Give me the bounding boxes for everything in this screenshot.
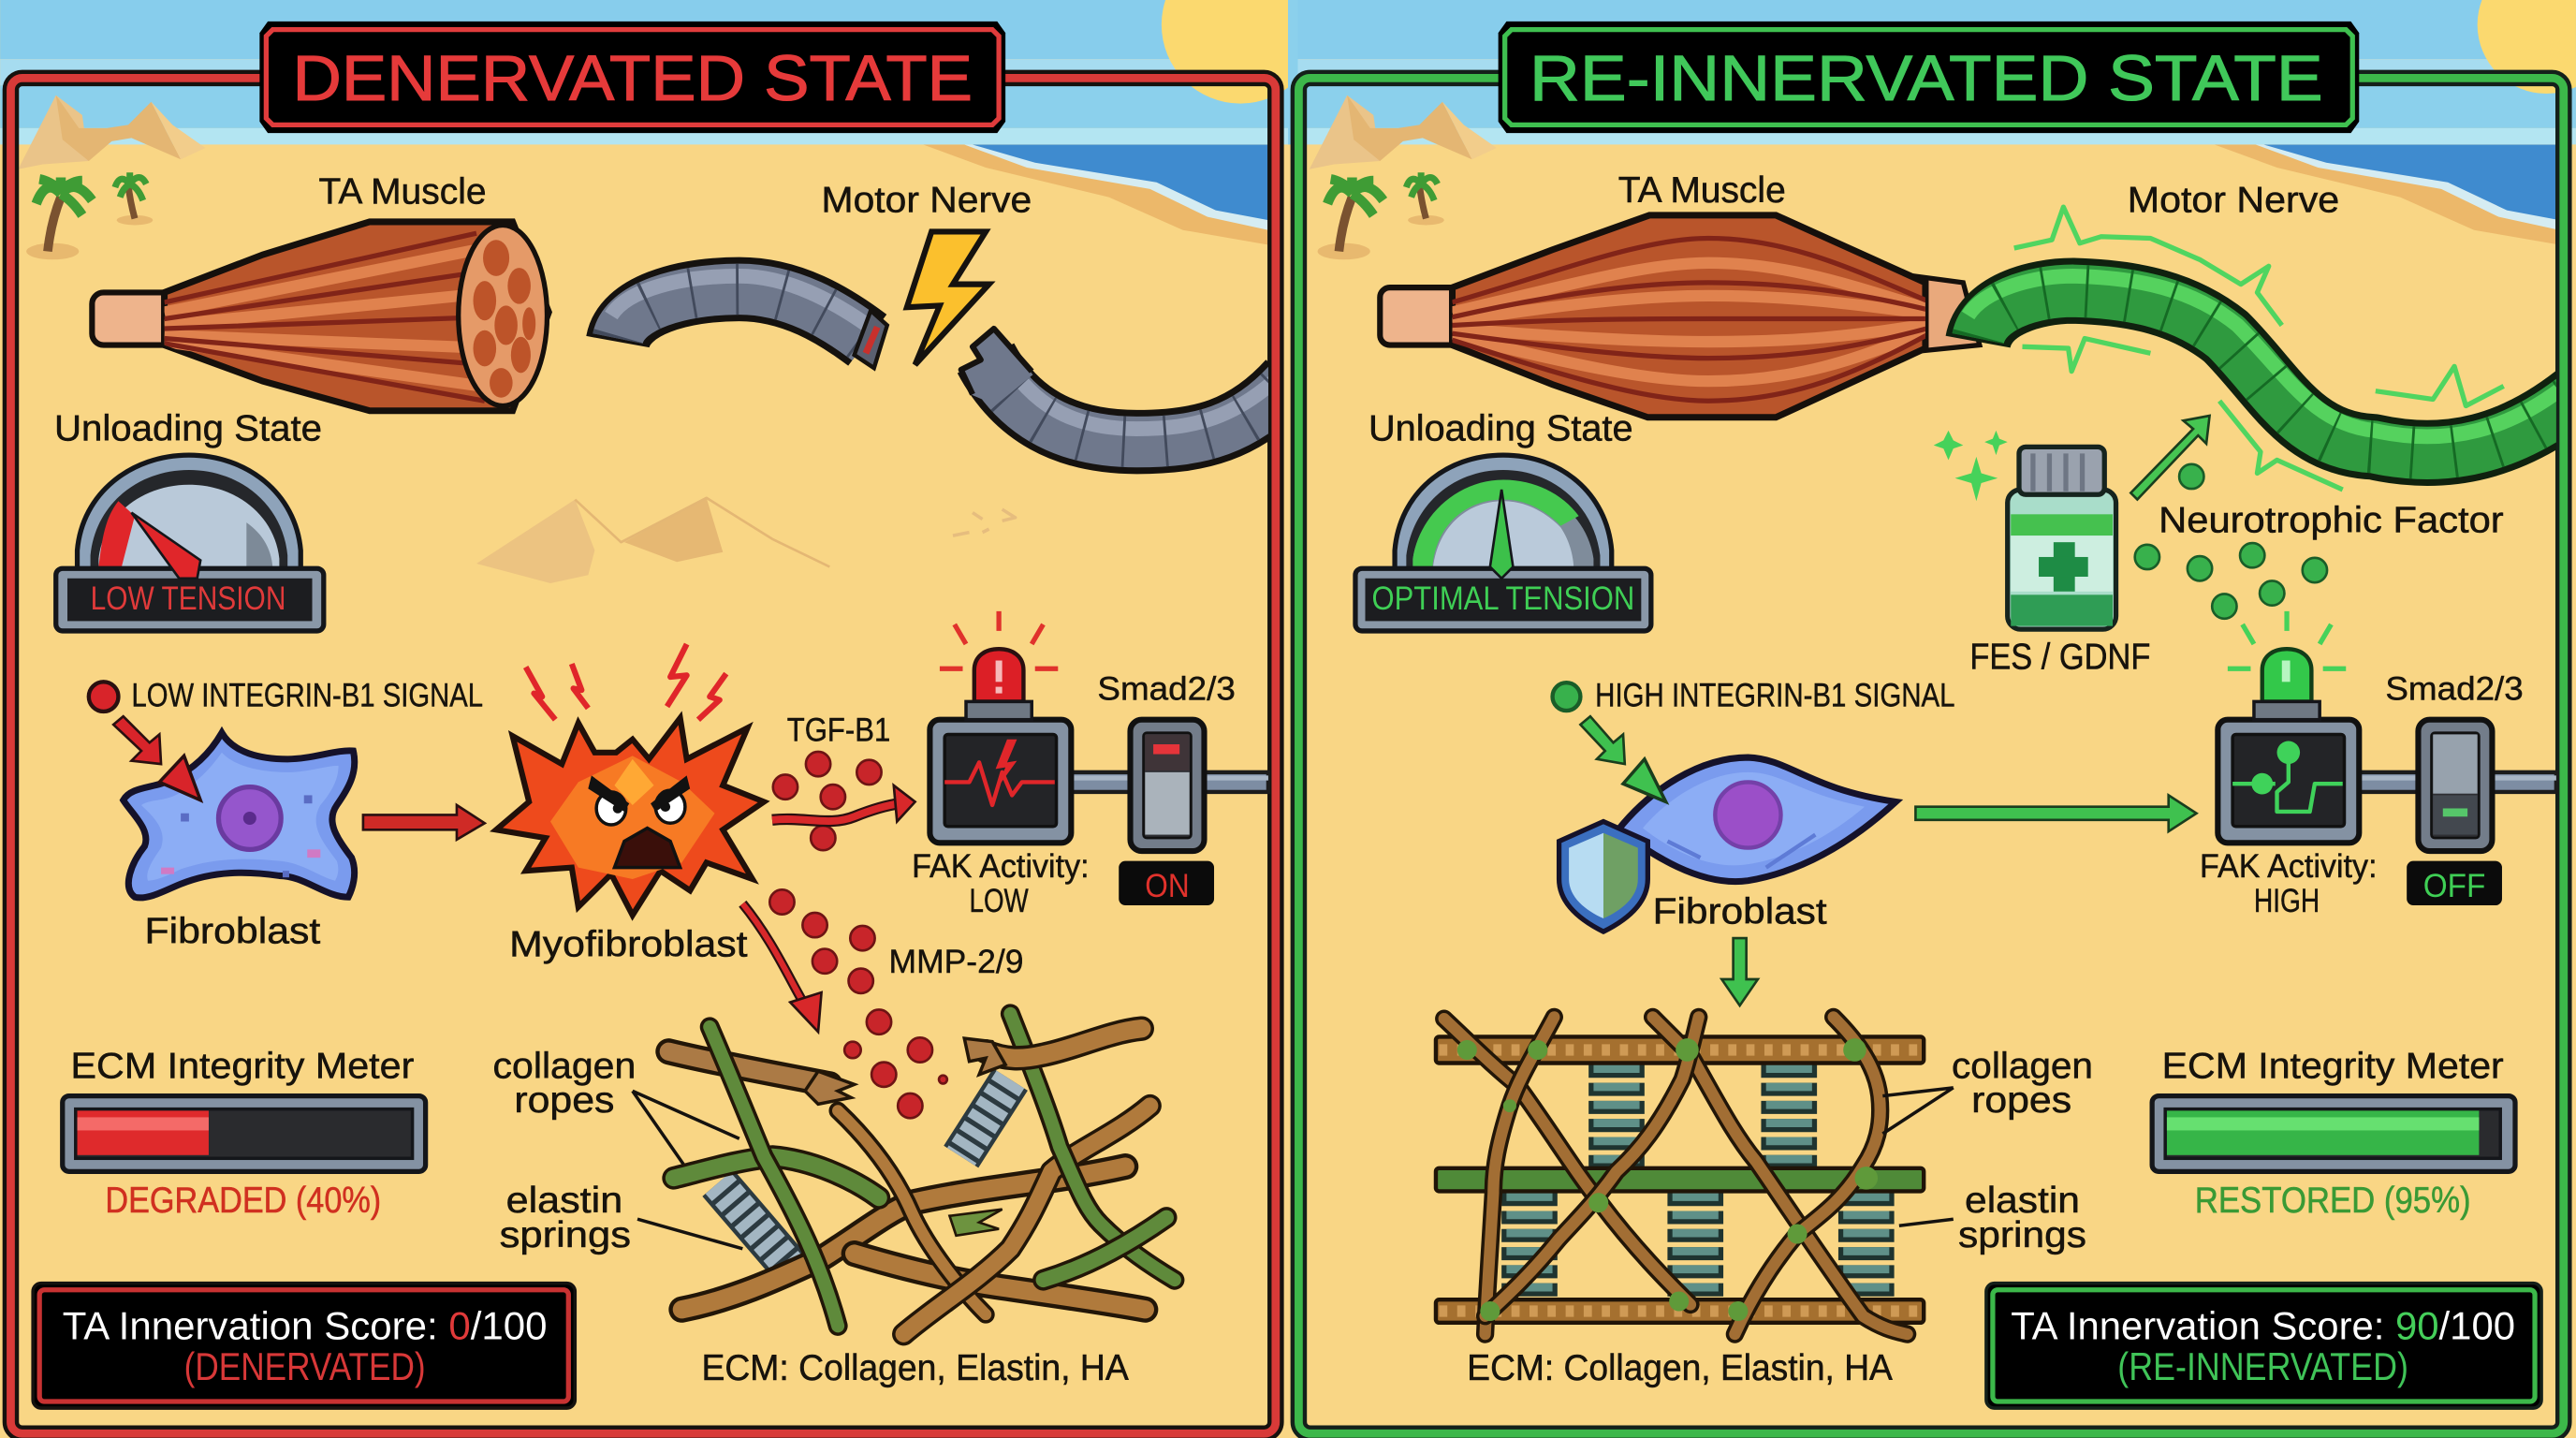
- badge: OFF: [2407, 861, 2502, 905]
- palm trees: [1318, 172, 1444, 259]
- FAK monitor screen: ordered circuit: [2232, 741, 2343, 812]
- leader lines: collagen: [633, 1091, 739, 1167]
- arrow: fibroblast to myofibroblast: [363, 805, 485, 840]
- FAK monitor screen: erratic trace: [944, 740, 1055, 805]
- arrowhead: TGF-B1: [894, 785, 915, 822]
- label: elastin springs: [1958, 1181, 2086, 1255]
- label: Neurotrophic Factor: Neurotrophic Factor: [2159, 501, 2504, 541]
- label: collagen ropes: [1952, 1046, 2093, 1121]
- label: ECM Integrity Meter: ECM Integrity Meter: [71, 1046, 414, 1086]
- score box: (RE-INNERVATED): [2117, 1344, 2408, 1388]
- icon: green status light: [2254, 649, 2320, 720]
- label: elastin springs: [500, 1181, 631, 1255]
- elastin springs: [1530, 1064, 1866, 1298]
- icon: protective shield: [1559, 822, 1647, 932]
- icon: red alarm siren: [966, 649, 1032, 720]
- badge: OFF: OFF: [2423, 868, 2485, 904]
- label: elastin springs: springs: [1958, 1215, 2086, 1255]
- panel: denervated state: [0, 0, 1319, 1438]
- ropes outlines and fills: [668, 1014, 1175, 1334]
- label: Smad2/3: Smad2/3: [1097, 671, 1236, 708]
- diagonal ropes: [1444, 1017, 1908, 1334]
- label: TA Muscle: TA Muscle: [319, 172, 487, 213]
- label: elastin springs: elastin: [1965, 1181, 2080, 1221]
- icon: severed nerve proximal stump: [611, 276, 887, 368]
- score box: (DENERVATED): [184, 1344, 426, 1388]
- meter: degraded: [63, 1096, 426, 1171]
- sky strip fill: [1288, 0, 1298, 144]
- horizontal ropes: [1436, 1036, 1924, 1323]
- diagram: organised ECM lattice: [1436, 1017, 1924, 1334]
- score box: [1986, 1284, 2541, 1408]
- label: collagen ropes: ropes: [514, 1080, 614, 1121]
- label: ECM composition: ECM: Collagen, Elastin, HA: [701, 1348, 1129, 1388]
- label: collagen ropes: collagen: [1952, 1046, 2093, 1086]
- frayed rope ends: [805, 1071, 855, 1104]
- title banner: RE-INNERVATED STATE: [1530, 42, 2323, 114]
- icon: integrin receptor: [159, 756, 200, 800]
- badge: ON: [1119, 861, 1214, 905]
- title banner: [1499, 22, 2359, 133]
- Smad switch: on: [1145, 734, 1190, 835]
- background: beach scene: [0, 0, 1288, 245]
- icon: optimal tension gauge: OPTIMAL TENSION: [1372, 580, 1634, 617]
- background dunes: [476, 498, 1016, 583]
- elastin springs, broken: [718, 1079, 1010, 1265]
- arrow: factor to nerve: [2130, 416, 2210, 500]
- icon: severed nerve distal segment: [961, 329, 1290, 442]
- label: Smad2/3: Smad2/3: [2385, 671, 2524, 708]
- icon: FAK monitor and Smad switch housing: [2217, 720, 2556, 851]
- icon: low tension gauge: LOW TENSION: [91, 580, 285, 617]
- label: Unloading State: Unloading State: [54, 408, 322, 448]
- icon: high integrin signal dot: [1553, 682, 1580, 711]
- title banner: [259, 22, 1005, 133]
- label: FAK activity high: [2200, 848, 2378, 919]
- icon: integrin receptor: [1623, 759, 1666, 801]
- icon: FAK monitor and Smad switch housing: [929, 720, 1268, 851]
- leader line: elastin: [1899, 1219, 1954, 1225]
- label: degraded percent: DEGRADED (40%): [105, 1181, 381, 1221]
- arrow: myofibroblast to ECM: [742, 903, 822, 1032]
- icon: low tension gauge: [56, 455, 324, 631]
- diagram: degraded ECM tangle: [668, 1014, 1175, 1334]
- panel: re-innervated state: [1288, 0, 2576, 1438]
- palm trees: [26, 172, 153, 259]
- label: Fibroblast: Fibroblast: [1653, 891, 1827, 932]
- icon: fibroblast cell: [124, 733, 355, 898]
- icon: sun: [1161, 0, 1288, 104]
- meter: restored: [2152, 1096, 2515, 1171]
- TGF-B1 molecules: [773, 752, 882, 850]
- label: TGF-B1: TGF-B1: [787, 712, 890, 749]
- Smad switch: off: [2433, 734, 2478, 835]
- background: beach scene: [1292, 0, 2576, 1438]
- label: FAK activity high: FAK Activity:: [2200, 848, 2378, 885]
- arrow: integrin to fibroblast: [113, 716, 161, 764]
- status light rays: [2228, 611, 2346, 668]
- label: elastin springs: springs: [500, 1215, 631, 1255]
- icon: red stress sparks: [526, 644, 726, 720]
- label: ECM Integrity Meter: ECM Integrity Meter: [2162, 1046, 2504, 1086]
- neurotrophic factor molecules: [2135, 464, 2327, 619]
- panel border: [10, 78, 1276, 1433]
- label: collagen ropes: ropes: [1971, 1080, 2071, 1121]
- icon: FES / GDNF bottle: [2008, 447, 2116, 629]
- icon: sparkles: [1934, 431, 2008, 501]
- label: collagen ropes: collagen: [493, 1046, 636, 1086]
- label: restored percent: RESTORED (95%): [2195, 1181, 2471, 1221]
- label: FAK activity low: FAK Activity:: [912, 848, 1090, 885]
- arrow: TGF-B1 to FAK: [772, 803, 900, 821]
- label: low integrin signal: LOW INTEGRIN-B1 SIGNAL: [131, 678, 483, 714]
- label: FAK activity low: LOW: [970, 883, 1029, 919]
- icon: atrophied TA muscle: [92, 222, 549, 411]
- leader lines: collagen: [1882, 1088, 1954, 1134]
- label: MMP-2/9: MMP-2/9: [889, 944, 1023, 980]
- label: elastin springs: elastin: [506, 1181, 622, 1221]
- label: FAK activity low: [914, 853, 1087, 912]
- label: Motor Nerve: Motor Nerve: [822, 180, 1032, 220]
- icon: healthy motor nerve: [1969, 276, 2576, 453]
- label: FAK activity high: HIGH: [2254, 883, 2320, 919]
- siren rays: [940, 611, 1058, 668]
- icon: angry myofibroblast: [496, 718, 764, 916]
- icon: healthy TA muscle: [1380, 215, 1980, 418]
- label: ECM composition: ECM: Collagen, Elastin, HA: [1467, 1348, 1893, 1388]
- icon: optimal tension gauge: [1355, 455, 1651, 631]
- icon: lightning bolt: [907, 231, 989, 365]
- badge: ON: ON: [1145, 868, 1190, 904]
- icon: sun: [2478, 0, 2576, 94]
- arrow: integrin to fibroblast: [1580, 716, 1625, 764]
- arrow: fibroblast to FAK: [1915, 795, 2197, 831]
- label: Unloading State: Unloading State: [1368, 408, 1633, 448]
- icon: spindle fibroblast cell: [1618, 757, 1895, 882]
- panel border: [1298, 78, 2564, 1433]
- score box: TA Innervation Score: 90/100: [2011, 1303, 2515, 1347]
- label: TA Muscle: TA Muscle: [1618, 170, 1786, 211]
- label: high integrin signal: HIGH INTEGRIN-B1 SIGNAL: [1595, 678, 1955, 714]
- label: Myofibroblast: Myofibroblast: [509, 924, 748, 964]
- icon: low integrin signal dot: [89, 682, 118, 712]
- title banner: DENERVATED STATE: [292, 42, 973, 114]
- label: Fibroblast: Fibroblast: [145, 911, 321, 951]
- leader line: elastin: [637, 1219, 742, 1249]
- score box: TA Innervation Score: 0/100: [63, 1303, 547, 1347]
- arrow: fibroblast to ECM: [1721, 938, 1758, 1005]
- nerve activity sparks: [2014, 207, 2504, 490]
- score box: [33, 1284, 575, 1408]
- label: collagen ropes: [493, 1046, 636, 1121]
- MMP molecules: [769, 889, 947, 1118]
- green crosslinks: [1457, 1038, 1878, 1321]
- label: FES / GDNF: FES / GDNF: [1969, 637, 2150, 677]
- label: Motor Nerve: Motor Nerve: [2128, 180, 2339, 220]
